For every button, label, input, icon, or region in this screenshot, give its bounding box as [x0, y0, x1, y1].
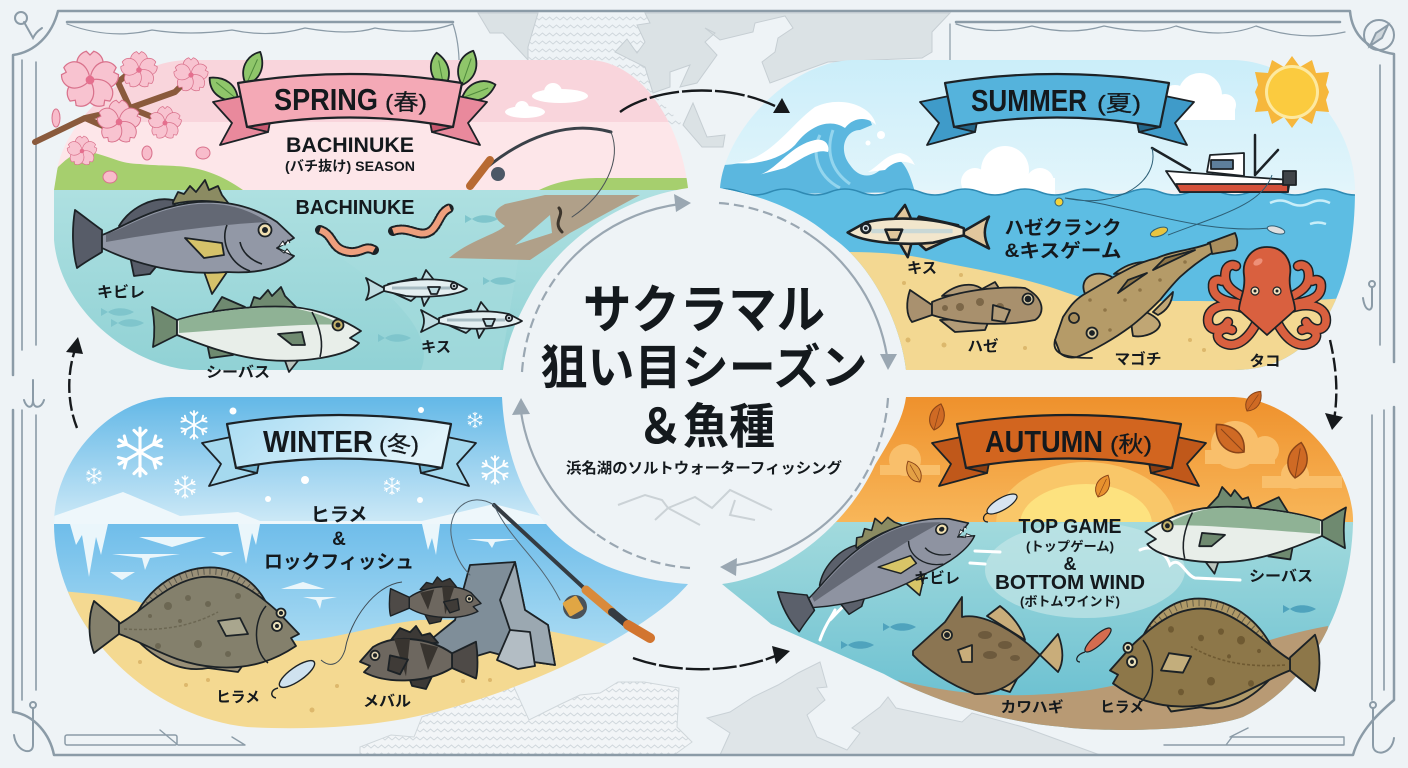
autumn sea: [710, 522, 1370, 737]
fish: mebaru 1: [389, 577, 481, 624]
map: Hamana lake land shapes: [360, 13, 1100, 755]
autumn labels: BOTTOM WIND: [995, 572, 1145, 594]
fishing lines and lures: [1055, 148, 1286, 239]
icon: spring fishing rod: [470, 128, 614, 217]
autumn labels: (ボトムワインド): [1020, 594, 1120, 609]
autumn title: (秋): [1110, 432, 1152, 457]
fish: mebaru 2: [360, 626, 478, 689]
fish: summer kisu: [848, 205, 989, 257]
icon: small autumn lure: [1077, 625, 1114, 662]
spring mud flat: [449, 195, 640, 260]
icon: winter rod: [451, 500, 650, 638]
autumn labels: TOP GAME: [1018, 516, 1122, 538]
winter labels: ヒラメ: [310, 505, 368, 526]
autumn labels: カワハギ: [1000, 699, 1064, 716]
summer banner: [920, 74, 1194, 145]
icon: sun: [1255, 56, 1329, 128]
autumn small fish: [841, 605, 1316, 649]
summer labels: タコ: [1250, 353, 1280, 370]
winter title: (冬): [379, 432, 419, 457]
autumn labels: &: [1064, 554, 1076, 574]
autumn labels: (トップゲーム): [1026, 539, 1114, 554]
icon: boat: [1152, 135, 1296, 192]
spring subtitle: [285, 134, 415, 174]
fish: magochi: [1054, 233, 1237, 358]
winter labels: &: [332, 529, 346, 550]
icon: bachinuke worms: [320, 208, 562, 252]
spring hill: [50, 152, 700, 190]
spring title: (春): [385, 90, 427, 115]
icon: autumn leaves: [902, 388, 1310, 500]
summer title: (夏): [1097, 91, 1141, 116]
winter labels: ヒラメ: [216, 689, 260, 706]
autumn labels: [914, 516, 1313, 716]
autumn light water: [985, 522, 1185, 618]
icon: rock: [418, 562, 555, 669]
fish: winter flounder: [90, 567, 299, 672]
spring text: bachinuke label: BACHINUKE: [296, 197, 414, 219]
autumn labels: ヒラメ: [1100, 699, 1144, 716]
summer labels: ハゼ: [968, 337, 998, 355]
autumn title: AUTUMN: [985, 424, 1103, 459]
spring sea: [54, 190, 676, 370]
autumn sun: [996, 462, 1175, 522]
summer title: SUMMER: [971, 83, 1087, 118]
summer wave marks: [1270, 200, 1330, 224]
spring leaves: [204, 48, 499, 107]
winter sea: [40, 524, 700, 644]
panel: autumn: [710, 390, 1370, 740]
spring labels: キス: [421, 339, 451, 356]
central title: ＆魚種: [637, 401, 775, 454]
summer labels: &キスゲーム: [1004, 240, 1122, 262]
panel: summer: [710, 50, 1370, 380]
spring subtitle: BACHINUKE: [286, 134, 414, 157]
summer clouds: [961, 73, 1236, 196]
winter snow mountains: [54, 492, 552, 526]
central title: [540, 282, 868, 454]
spring labels: シーバス: [206, 364, 270, 381]
spring water channel: [515, 215, 552, 245]
summer labels: ハゼクランク: [1004, 216, 1122, 239]
icon: autumn lure: [984, 490, 1020, 522]
spring clouds: [505, 83, 588, 118]
winter labels: メバル: [363, 693, 411, 710]
autumn sand: [897, 626, 1328, 740]
winter sand: [68, 592, 607, 728]
central subtitle: 浜名湖のソルトウォーターフィッシング: [566, 457, 842, 478]
spring banner: [213, 74, 487, 145]
fish: autumn kibire: [766, 482, 988, 652]
summer sea: [710, 189, 1370, 380]
winter labels: ロックフィッシュ: [264, 551, 414, 573]
summer sand: [850, 252, 1345, 380]
fish: spring seabass: [152, 287, 361, 372]
winter banner: [202, 415, 476, 486]
fish: autumn seabass: [1145, 487, 1346, 574]
fish: spring kibire: [73, 180, 294, 294]
autumn labels: キビレ: [914, 569, 960, 587]
icon: winter lure: [272, 582, 402, 698]
winter title: WINTER: [263, 424, 373, 459]
fish: spring kisu 2: [421, 302, 522, 338]
gray circular arrows: [512, 194, 897, 576]
spring subtitle: (バチ抜け) SEASON: [285, 158, 415, 174]
autumn banner: [932, 415, 1206, 486]
spring deep water band: [411, 319, 507, 370]
autumn clouds: [880, 421, 1342, 489]
sand specks: [902, 273, 1206, 352]
autumn splash: [820, 548, 1240, 640]
panel: spring: [40, 50, 700, 380]
black cycle arrows: [66, 91, 1343, 669]
winter labels: [216, 505, 414, 710]
summer labels: [907, 216, 1280, 370]
fish: spring kisu 1: [366, 270, 467, 306]
spring labels: キビレ: [97, 283, 145, 301]
icon: octopus: [1208, 247, 1326, 345]
sand specks: [138, 660, 492, 712]
autumn labels: シーバス: [1249, 568, 1313, 585]
spring cherry branch: [35, 51, 210, 183]
icon: compass: [1364, 20, 1394, 50]
fish: filefish: [913, 597, 1062, 694]
summer big wave: [720, 102, 915, 195]
summer labels: マゴチ: [1114, 350, 1162, 368]
fish: autumn flounder: [1110, 599, 1320, 711]
central title: 狙い目シーズン: [540, 342, 868, 395]
spring labels: [97, 283, 451, 381]
spring small fish: [101, 215, 516, 342]
panel: winter: [40, 390, 700, 740]
spring title: SPRING: [274, 82, 378, 117]
icon: snowflakes: [86, 407, 509, 503]
fish: goby: [907, 282, 1042, 332]
central title: サクラマル: [583, 282, 825, 340]
summer labels: キス: [907, 260, 937, 277]
icicles and ice floes: [70, 524, 516, 609]
